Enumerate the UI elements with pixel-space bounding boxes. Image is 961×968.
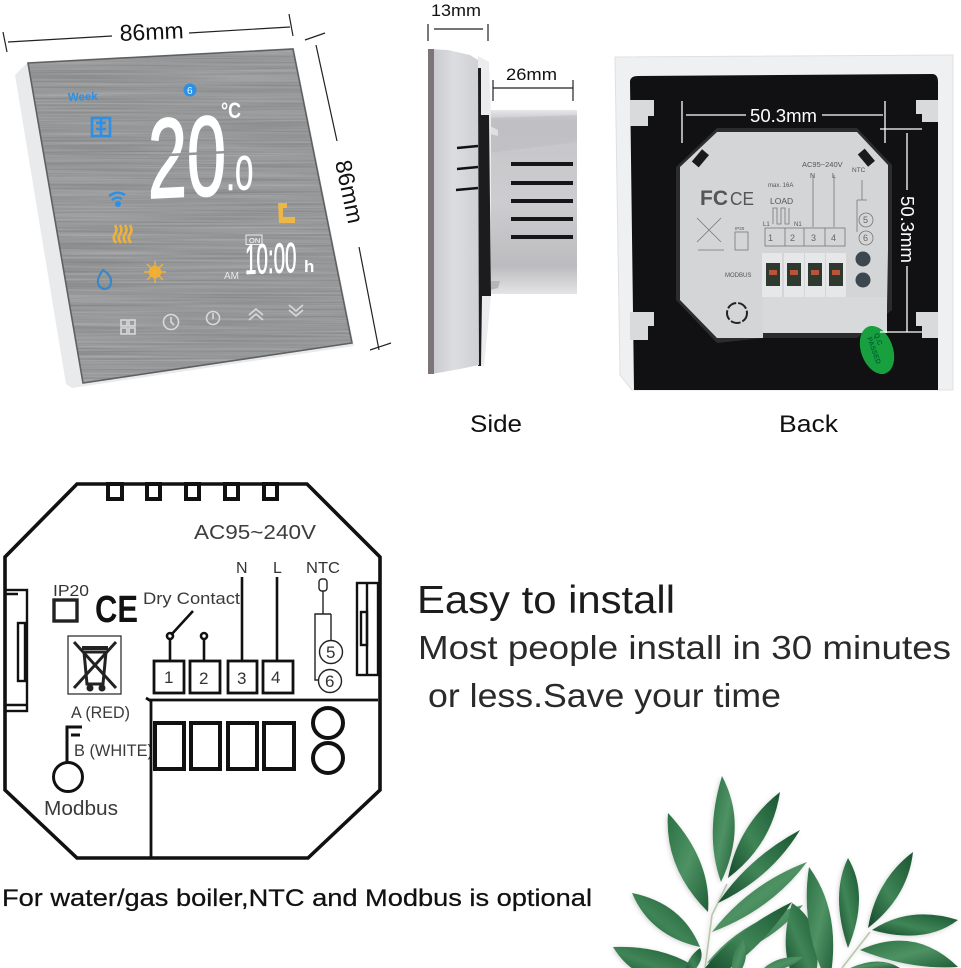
clock reading: h [304,257,314,276]
module labels: IP20 [735,226,745,231]
dimension: 50.3mm vertical [880,129,922,332]
IP20 mark [53,583,89,621]
temperature reading: °C [221,98,241,123]
front view: thermostat face with dimensions [3,14,391,390]
modbus labels: Modbus [44,798,118,820]
icon: manual hand [98,270,111,289]
icon: moon [278,203,295,223]
terminal module: 3 [811,233,816,243]
icon: wifi [109,193,125,206]
N L NTC labels: NTC [306,560,340,577]
leaves [613,776,958,968]
rear housing block [488,110,577,294]
module labels: L1 [763,222,770,228]
dimension: 50.3mm horizontal [682,101,885,143]
NTC sensor [315,579,342,692]
top notches [108,484,277,499]
module labels: L [832,173,836,180]
dimension: 86mm width: 86mm [119,17,184,46]
mounting plate [478,56,491,366]
module labels: NTC [852,167,866,174]
terminal numbers [697,175,873,250]
modbus connector [54,727,82,792]
divider [146,698,378,858]
mounting tabs [630,100,938,340]
terminal module: 4 [831,233,836,243]
NTC numbers: 6 [325,672,334,691]
icon: bluetooth badge: 6 [187,86,193,97]
temperature reading: 20 [148,92,226,222]
text: install time: Most people install in 30 minutes [418,630,951,667]
back view of thermostat [615,55,953,390]
button: power [206,312,220,324]
icon: home schedule [92,118,110,136]
clock reading: AM [224,271,239,282]
terminal screws [762,252,887,333]
button: down [289,305,303,316]
clock reading [224,235,314,284]
module labels: AC95~240V [802,160,843,169]
status icons [68,84,295,289]
module labels [700,160,866,279]
NTC numbers [325,643,335,691]
terminal numbers: 2 [199,669,208,688]
terminal numbers: 3 [237,669,246,688]
button: clock [164,314,178,330]
white base plate [615,55,953,390]
dimension: 86mm width [3,14,293,52]
terminal module: 2 [790,233,795,243]
terminal module: 6 [863,233,868,243]
module labels: N [810,173,815,180]
IP20 mark: IP20 [53,583,89,600]
dimension: 26mm [493,65,573,101]
touch buttons [121,305,303,334]
face plate clips [456,146,478,190]
terminal numbers: 1 [164,668,173,687]
NTC numbers: 5 [326,643,335,662]
module slots [692,149,875,167]
terminal wires [167,577,277,661]
lower terminal slots [155,723,294,769]
face plate [428,49,479,374]
modbus port [727,303,747,323]
device frame [15,48,354,388]
black gasket [478,68,491,366]
terminal numbers [164,668,280,688]
outline [5,484,380,858]
heading: easy to install: Easy to install [417,579,675,622]
dimension: 13mm [428,1,488,41]
QC passed sticker: PASSED [865,336,881,365]
modbus labels [44,703,153,820]
QC passed sticker: Q.C [872,332,883,346]
module labels: MODBUS [725,273,751,279]
terminal numbers: 4 [271,668,280,687]
CE mark: CE [95,589,138,631]
temperature reading: .0 [226,146,253,201]
leaf stems [705,884,870,968]
terminal module [676,128,892,343]
module labels: LOAD [770,196,793,206]
week label: Week [68,91,99,104]
module labels: FC [700,187,728,210]
N L NTC labels [236,560,340,577]
dry contact label: Dry Contact [143,589,240,608]
terminal module: 5 [863,215,868,225]
dimension: 86mm height [305,33,391,350]
clock reading: 10:00 [245,235,296,284]
brushed metal touch panel [20,40,360,390]
text: install time [418,630,951,715]
dimension: 26mm: 26mm [506,65,557,84]
QC passed sticker [860,326,894,374]
voltage label: AC95~240V [194,522,317,544]
side view of thermostat [428,1,577,374]
black base plate [630,74,938,390]
note: optional parts: For water/gas boiler,NTC and Modbus is optional [2,885,592,912]
dimension: 50.3mm vertical: 50.3mm [897,196,918,263]
module labels: N1 [794,222,802,228]
side clips [5,583,378,711]
module labels: CE [730,189,754,209]
N L NTC labels: L [273,560,282,577]
button: menu [121,320,135,334]
modbus labels: A (RED) [71,703,130,722]
N L NTC labels: N [236,560,248,577]
clock reading: ON [249,236,260,245]
WEEE mark [68,636,121,694]
wiring diagram [5,484,380,858]
icon: sun [144,261,166,283]
icon: bluetooth badge [184,84,196,97]
panel edge [28,49,352,383]
modbus labels: B (WHITE) [74,741,153,760]
decoration: green leaves [613,776,958,968]
side caption: Side [470,411,522,438]
text: install time: or less.Save your time [428,678,781,715]
dimension: 50.3mm horizontal: 50.3mm [750,105,817,126]
face plate mirror edge [428,49,434,374]
screw circles [313,708,343,773]
dimension: 86mm height: 86mm [330,158,369,226]
terminal module: 1 [768,233,773,243]
terminal boxes [154,661,293,693]
dimension: 13mm: 13mm [431,1,481,20]
button: up [249,309,263,320]
icon: heating coil [114,225,132,243]
back caption: Back [779,411,839,438]
module labels: max. 16A [768,183,793,189]
